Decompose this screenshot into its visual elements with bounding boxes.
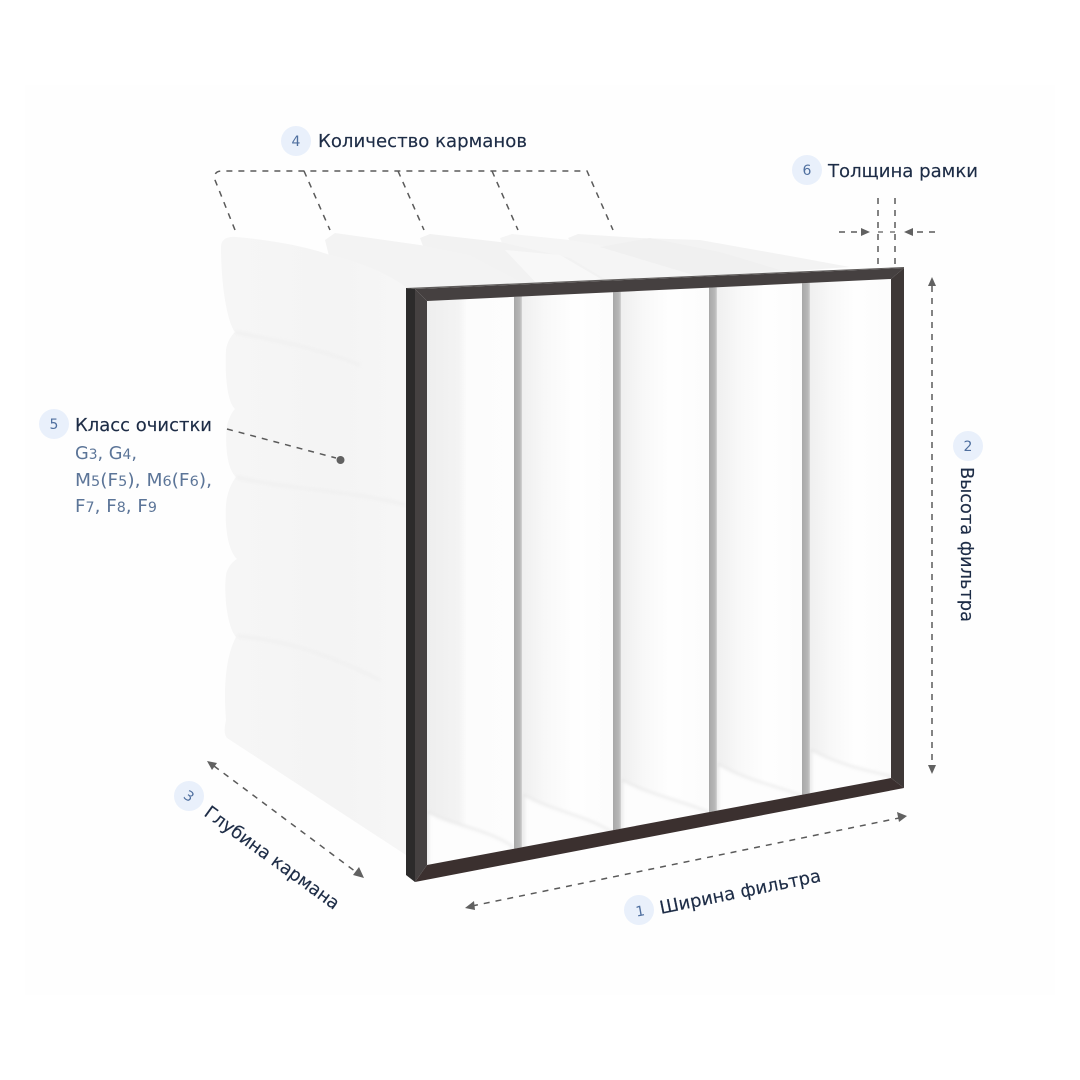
filtration class values: M5(F5), M6(F6), xyxy=(75,470,212,491)
frame spacers xyxy=(514,280,810,870)
label 1: filter width: Ширина фильтра xyxy=(658,866,823,919)
label 6: frame thickness: 6 xyxy=(803,163,812,179)
label 3: pocket depth xyxy=(174,761,364,914)
label 5: filtration class: 5 xyxy=(50,417,58,433)
label 3: pocket depth: Глубина кармана xyxy=(200,802,343,914)
filter side panel (pocket material) xyxy=(221,237,406,855)
label 5: filtration class xyxy=(39,409,344,517)
label 6: frame thickness: Толщина рамки xyxy=(827,161,978,182)
label 3: pocket depth: 3 xyxy=(180,788,197,806)
filtration class values: G3, G4, xyxy=(75,443,137,464)
label 2: filter height: 2 xyxy=(964,439,972,455)
filtration class values: F7, F8, F9 xyxy=(75,496,157,517)
label 1: filter width xyxy=(465,812,907,925)
label 2: filter height: Высота фильтра xyxy=(956,467,977,622)
label 4: number of pockets: 4 xyxy=(292,134,301,150)
label 5: filtration class: Класс очистки xyxy=(75,415,212,436)
label 6: frame thickness xyxy=(792,155,978,268)
filter frame xyxy=(406,267,904,882)
pocket bays inside frame xyxy=(427,275,891,875)
label 1: filter width: 1 xyxy=(635,903,646,921)
label 4: number of pockets: Количество карманов xyxy=(318,131,527,152)
filter back pockets (top) xyxy=(325,233,850,294)
label 4: number of pockets xyxy=(215,126,613,230)
infographic: pocket filter dimensions xyxy=(39,126,983,925)
pocket floors xyxy=(430,755,891,864)
label 2: filter height xyxy=(928,277,983,774)
filtration class values xyxy=(75,443,212,517)
